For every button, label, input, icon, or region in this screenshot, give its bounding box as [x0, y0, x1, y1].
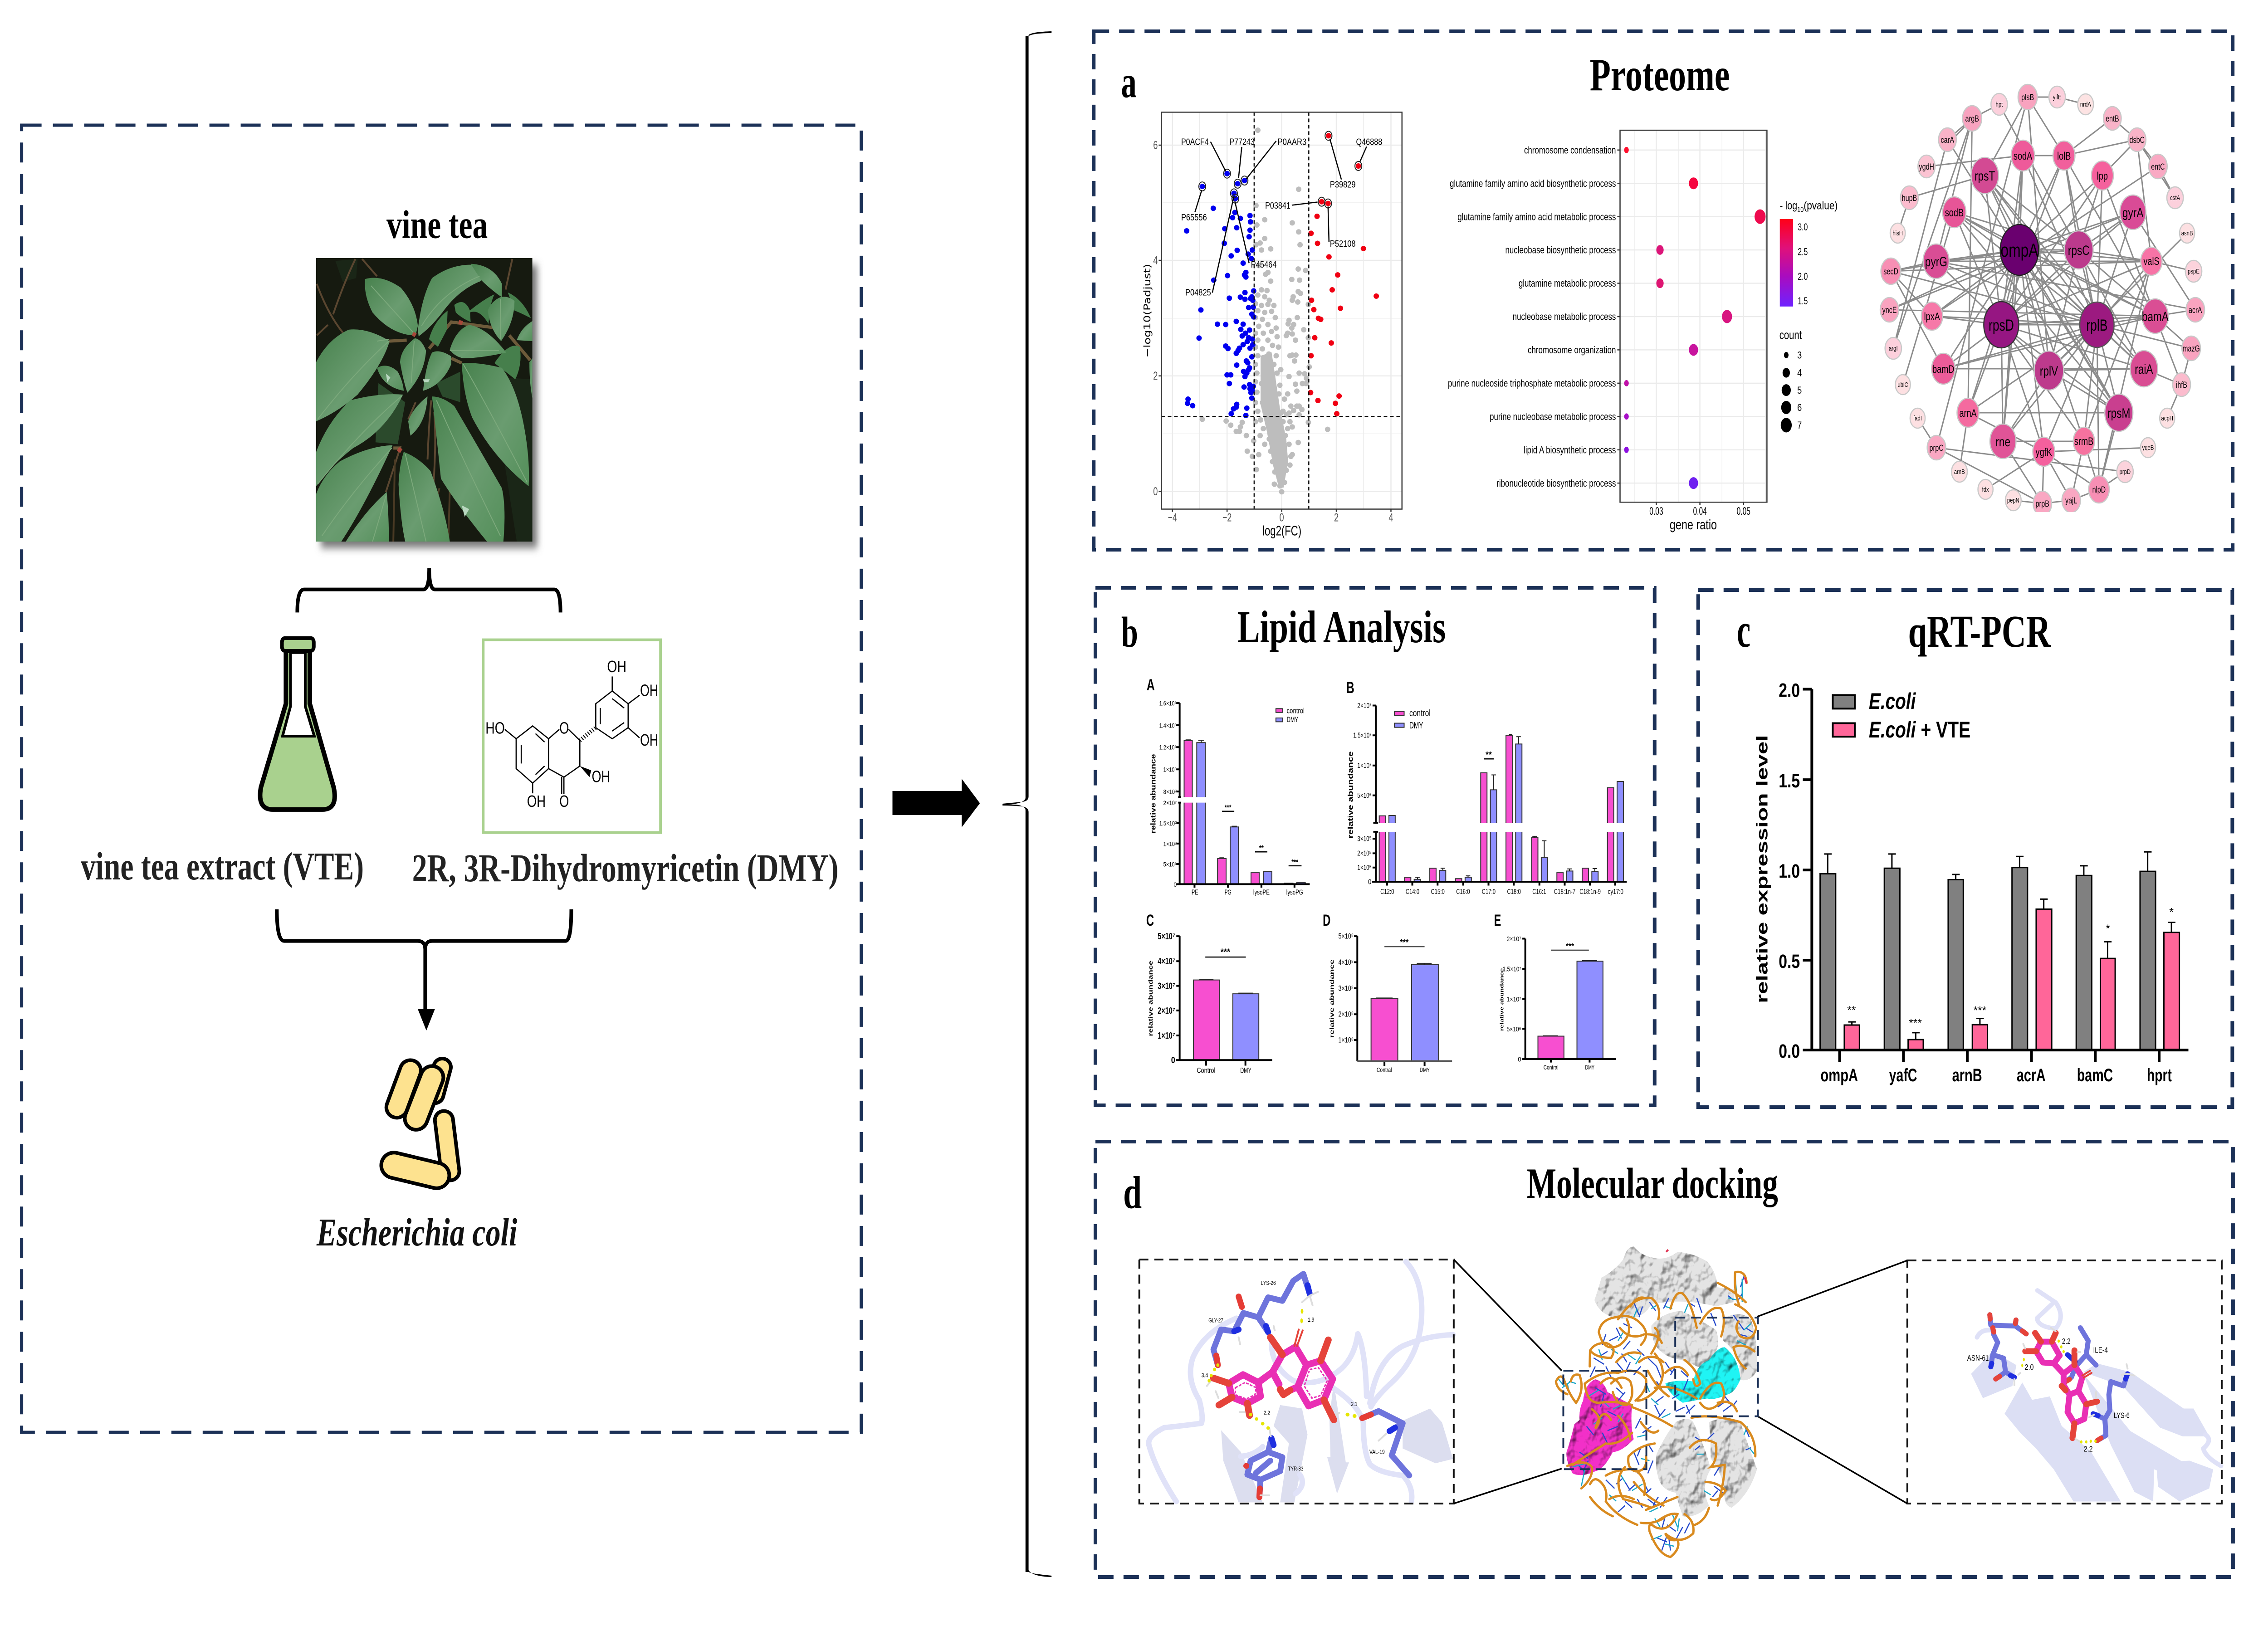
- molecule: dihydromyricetin structure: [483, 640, 660, 833]
- chart A: phospholipid classes: 1.2×10⁸: [1159, 744, 1177, 751]
- letter d and title: d: [1123, 1167, 1142, 1218]
- right docking inset: 2.0: [2024, 1363, 2033, 1372]
- chart D: control vs DMY: 4×10⁸: [1339, 957, 1354, 967]
- GO enrichment dot plot: 0.05: [1737, 505, 1750, 517]
- network node labels: argI: [1889, 344, 1898, 352]
- bar chart: relative expression level: 0.5: [1779, 951, 1800, 972]
- letter c and title: [1737, 604, 2051, 658]
- network node labels: rplB: [2086, 316, 2107, 334]
- network node labels: rpsM: [2107, 405, 2130, 421]
- chart B: fatty acids: C12:0: [1380, 888, 1394, 896]
- volcano plot: 0: [1153, 485, 1158, 498]
- GO enrichment dot plot: nucleobase biosynthetic process: [1505, 244, 1616, 256]
- network node labels: rpsC: [2068, 243, 2090, 258]
- network node labels: dsbC: [2130, 135, 2145, 145]
- panel: vine tea to Escherichia coli overview: [22, 125, 861, 1432]
- network node labels: prpB: [2035, 499, 2049, 509]
- chart E: control vs DMY: DMY: [1585, 1064, 1594, 1071]
- chart E: control vs DMY: 1×10⁷: [1507, 996, 1521, 1003]
- network node labels: lolB: [2057, 150, 2071, 162]
- chart D: control vs DMY: D: [1323, 911, 1330, 929]
- network node labels: ygfK: [2036, 446, 2052, 459]
- color and size legend: 3.0: [1798, 221, 1808, 233]
- network node labels: [1882, 93, 2202, 509]
- bar chart: relative expression level: ***: [1974, 1004, 1986, 1016]
- bar chart: relative expression level: 1.0: [1779, 860, 1800, 882]
- color and size legend: 10: [1797, 205, 1804, 214]
- chart C: control vs DMY: DMY: [1240, 1066, 1251, 1074]
- chart B: fatty acids: C16:0: [1456, 888, 1470, 896]
- GO enrichment dot plot: chromosome organization: [1528, 344, 1616, 356]
- chart A: phospholipid classes: 0: [1174, 881, 1177, 889]
- labels: extract and compound: 2R, 3R-Dihydromyricetin (DMY): [412, 846, 838, 890]
- volcano plot: Q46888: [1356, 137, 1382, 147]
- right docking inset: ILE-4: [2093, 1346, 2108, 1355]
- chart B: fatty acids: C18:1n-7: [1554, 888, 1575, 896]
- chart D: control vs DMY: 3×10⁸: [1339, 984, 1354, 992]
- chart A: phospholipid classes: lysoPE: [1253, 889, 1270, 896]
- volcano plot: P0ACF4: [1181, 137, 1209, 147]
- up-regulated points: [1310, 136, 1376, 414]
- volcano plot: −log10(Padjust): [1142, 264, 1153, 357]
- left docking inset: 2.1: [1351, 1401, 1357, 1407]
- panel d border: [1095, 1142, 2233, 1577]
- network node labels: prpC: [1930, 443, 1944, 453]
- GO enrichment dot plot: 0.03: [1649, 505, 1663, 517]
- chart B: fatty acids: C15:0: [1431, 888, 1445, 896]
- chart D: control vs DMY: relative abundance: [1329, 959, 1335, 1038]
- chart A: phospholipid classes: 1.5×10⁷: [1159, 820, 1177, 827]
- panel c border: [1698, 590, 2232, 1107]
- bar chart: relative expression level: **: [1847, 1004, 1856, 1016]
- chart E: control vs DMY: relative abundance: [1499, 968, 1505, 1031]
- chart B: fatty acids: C14:0: [1406, 888, 1419, 896]
- highlighted proteins: [1195, 131, 1367, 293]
- left docking inset: GLY-27: [1208, 1318, 1223, 1324]
- right docking inset: [1907, 1260, 2222, 1504]
- volcano plot: [1142, 112, 1402, 538]
- labels: extract and compound: [81, 844, 838, 890]
- surface: cyan protein: [1665, 1347, 1740, 1403]
- chart E: control vs DMY: Contral: [1544, 1064, 1559, 1071]
- vine tea title: vine tea: [386, 203, 488, 247]
- chart B: fatty acids: 2×10⁵: [1357, 849, 1371, 858]
- bar chart: relative expression level: ***: [1909, 1017, 1922, 1029]
- chart B: fatty acids: 1×10⁷: [1357, 762, 1371, 770]
- letter b and title: b: [1121, 609, 1138, 656]
- left docking inset: [1139, 1260, 1454, 1504]
- panel a: proteome: [1094, 31, 2233, 550]
- network node labels: srmB: [2074, 435, 2093, 448]
- network node labels: ygdH: [1919, 162, 1934, 172]
- network node labels: entC: [2151, 162, 2165, 172]
- network node labels: rpsD: [1989, 316, 2014, 334]
- network node labels: arnB: [1954, 468, 1965, 475]
- GO enrichment dot plot: lipid A biosynthetic process: [1524, 444, 1616, 455]
- left docking inset: VAL-19: [1369, 1449, 1385, 1455]
- letter a and title: a: [1121, 58, 1137, 107]
- chart A: phospholipid classes: ***: [1225, 804, 1232, 812]
- legend: [1833, 688, 1970, 742]
- network node labels: pyrG: [1925, 254, 1947, 269]
- chart A: phospholipid classes: [1147, 676, 1310, 896]
- chart D: control vs DMY: 2×10⁸: [1339, 1010, 1354, 1019]
- chart C: control vs DMY: 5×10⁷: [1158, 932, 1175, 942]
- chart A: phospholipid classes: PG: [1225, 889, 1232, 896]
- letter a and title: [1121, 49, 1730, 107]
- network node labels: rplV: [2040, 363, 2058, 379]
- photo: vine tea leaves: [316, 258, 533, 542]
- network node labels: carA: [1941, 135, 1955, 145]
- network node labels: yncE: [1882, 305, 1897, 315]
- volcano plot: P0AAR3: [1277, 137, 1306, 147]
- bar chart: relative expression level: bamC: [2077, 1065, 2113, 1085]
- chart B: fatty acids: [1346, 679, 1627, 896]
- non significant points: [1202, 130, 1328, 492]
- volcano plot: P03841: [1265, 200, 1290, 211]
- photo drop shadow: [321, 265, 537, 548]
- network node labels: bamA: [2142, 309, 2169, 324]
- network node labels: sodB: [1945, 207, 1964, 219]
- chart A: phospholipid classes: PE: [1192, 889, 1198, 896]
- left docking inset: LYS-26: [1261, 1280, 1276, 1286]
- volcano plot: −4: [1168, 511, 1177, 524]
- chart E: control vs DMY: 0: [1518, 1056, 1521, 1063]
- volcano plot: 4: [1388, 511, 1393, 524]
- GO enrichment dot plot: purine nucleobase metabolic process: [1490, 410, 1616, 422]
- chart B: fatty acids: cy17:0: [1608, 888, 1623, 896]
- overview panel border: [22, 125, 861, 1432]
- network node labels: plsB: [2021, 93, 2034, 103]
- chart D: control vs DMY: DMY: [1420, 1067, 1430, 1074]
- network node labels: hisH: [1892, 229, 1903, 237]
- ligand sticks: dihydromyricetin: [1229, 1347, 1333, 1406]
- GO enrichment dot plot: chromosome condensation: [1524, 144, 1616, 156]
- color and size legend: 2.0: [1798, 270, 1808, 282]
- legend: + VTE: [1921, 717, 1970, 742]
- color and size legend: 2.5: [1798, 246, 1808, 258]
- bar chart: relative expression level: 2.0: [1779, 679, 1800, 701]
- bar chart: relative expression level: relative expression level: [1754, 735, 1771, 1003]
- molecule: dihydromyricetin structure: OH: [592, 768, 610, 786]
- GO enrichment dot plot: glutamine family amino acid biosynthetic process: [1450, 177, 1616, 189]
- network node labels: fdx: [1982, 485, 1989, 493]
- volcano plot: P45464: [1251, 259, 1276, 270]
- network node labels: lpp: [2097, 170, 2108, 182]
- chart A: phospholipid classes: A: [1147, 676, 1155, 694]
- panel a border: [1094, 31, 2233, 550]
- chart B: fatty acids: C18:0: [1507, 888, 1521, 896]
- labels: extract and compound: vine tea extract (VTE): [81, 844, 364, 888]
- chart D: control vs DMY: 1×10⁸: [1339, 1035, 1354, 1044]
- molecule: dihydromyricetin structure: OH: [640, 682, 658, 700]
- letter d and title: [1123, 1160, 1778, 1218]
- letter b and title: [1121, 602, 1446, 656]
- chart B: fatty acids: relative abundance: [1347, 751, 1355, 838]
- chart B: fatty acids: DMY: [1409, 721, 1423, 731]
- color and size legend: 5: [1797, 384, 1802, 396]
- GO enrichment dot plot: nucleobase metabolic process: [1513, 311, 1616, 322]
- right docking inset: ASN-61: [1967, 1354, 1989, 1363]
- bar chart: relative expression level: hprt: [2147, 1065, 2172, 1085]
- right docking inset: 2.2: [2062, 1337, 2071, 1346]
- letter b and title: Lipid Analysis: [1237, 602, 1446, 652]
- Escherichia coli label: Escherichia coli: [316, 1210, 518, 1254]
- rRNA base ticks: [1578, 1276, 1753, 1551]
- connector lines between insets and ribosome: [1454, 1260, 1907, 1504]
- chart D: control vs DMY: [1323, 911, 1452, 1074]
- chart B: fatty acids: 3×10⁵: [1357, 835, 1371, 843]
- chart C: control vs DMY: relative abundance: [1147, 961, 1154, 1036]
- bar chart: relative expression level: *: [2169, 906, 2174, 918]
- network node labels: ubiC: [1897, 381, 1908, 388]
- network node labels: hpt: [1996, 100, 2003, 108]
- center dashed focus boxes: [1563, 1318, 1758, 1469]
- chart A: phospholipid classes: 1.4×10⁸: [1159, 723, 1177, 729]
- chart C: control vs DMY: 4×10⁷: [1158, 957, 1175, 967]
- surface: magenta protein: [1566, 1379, 1634, 1475]
- volcano plot: P39829: [1330, 179, 1356, 190]
- network nodes: [1880, 84, 2204, 516]
- volcano plot: 2: [1153, 370, 1158, 382]
- volcano plot: log2(FC): [1262, 523, 1301, 538]
- color and size legend: (pvalue): [1804, 199, 1838, 212]
- volcano plot: 0: [1280, 511, 1284, 524]
- network node labels: yajL: [2065, 496, 2077, 506]
- color and size legend: 3: [1797, 349, 1802, 361]
- chart A: phospholipid classes: 8×10⁷: [1163, 789, 1177, 796]
- color and size legend: 6: [1797, 402, 1802, 413]
- chart A: phospholipid classes: relative abundance: [1149, 754, 1158, 834]
- network node labels: acpH: [2161, 414, 2173, 422]
- network node labels: nrdA: [2080, 100, 2091, 108]
- left docking inset: 3.4: [1202, 1372, 1208, 1379]
- color and size legend: 7: [1797, 420, 1802, 431]
- network node labels: valS: [2143, 255, 2160, 268]
- network node labels: nlpD: [2092, 485, 2106, 495]
- volcano plot: P77243: [1229, 137, 1255, 147]
- chart E: control vs DMY: 5×10⁶: [1507, 1025, 1521, 1033]
- chart B: fatty acids: 5×10⁶: [1357, 791, 1371, 800]
- chart A: phospholipid classes: ***: [1291, 859, 1299, 866]
- molecule: dihydromyricetin structure: O: [559, 720, 569, 737]
- molecule: dihydromyricetin structure: O: [559, 793, 569, 811]
- icon: flask with vine tea extract: [260, 638, 335, 810]
- chart E: control vs DMY: E: [1494, 911, 1501, 929]
- volcano plot: 2: [1334, 511, 1339, 524]
- chart A: phospholipid classes: 1×10⁸: [1163, 767, 1177, 773]
- network node labels: fadI: [1913, 414, 1922, 422]
- chart A: phospholipid classes: lysoPG: [1286, 889, 1303, 896]
- color and size legend: 4: [1797, 367, 1802, 379]
- chart B: fatty acids: C17:0: [1482, 888, 1496, 896]
- GO enrichment dot plot: glutamine metabolic process: [1519, 278, 1616, 289]
- left docking inset: 2.2: [1264, 1410, 1270, 1416]
- right docking inset: 2.2: [2084, 1445, 2093, 1454]
- network node labels: entB: [2106, 114, 2119, 124]
- volcano plot: P52108: [1330, 239, 1356, 249]
- chart C: control vs DMY: 3×10⁷: [1158, 981, 1175, 991]
- rRNA backbone: [1556, 1272, 1756, 1557]
- chart B: fatty acids: 1.5×10⁷: [1353, 731, 1371, 739]
- network node labels: pepN: [2007, 496, 2019, 504]
- protein interaction network: [1880, 84, 2204, 526]
- panel c: qRT-PCR: [1698, 590, 2232, 1107]
- chart C: control vs DMY: Control: [1197, 1066, 1215, 1074]
- chart C: control vs DMY: ***: [1221, 947, 1230, 957]
- volcano plot: −2: [1222, 511, 1232, 524]
- lipid charts: [1146, 676, 1627, 1074]
- bar chart: relative expression level: yafC: [1889, 1065, 1917, 1085]
- network node labels: raiA: [2135, 361, 2153, 377]
- chart E: control vs DMY: 2×10⁷: [1507, 935, 1521, 943]
- letter a and title: Proteome: [1590, 49, 1730, 100]
- volcano plot: P04825: [1185, 287, 1211, 298]
- bar chart: relative expression level: [1754, 679, 2189, 1085]
- GO enrichment dot plot: [1448, 130, 1838, 532]
- network node labels: yifE: [2053, 93, 2062, 101]
- arrow: overview to analyses: [892, 779, 980, 827]
- ribosome structure: [1556, 1246, 1758, 1557]
- chart C: control vs DMY: [1146, 911, 1272, 1074]
- surface: gray protein subunits: [1594, 1246, 1757, 1517]
- network node labels: hupB: [1902, 193, 1917, 203]
- chart A: phospholipid classes: 1×10⁷: [1163, 841, 1177, 848]
- chart B: fatty acids: 2×10⁷: [1357, 701, 1371, 710]
- color and size legend: [1779, 199, 1838, 432]
- color and size legend: 1.5: [1798, 295, 1808, 307]
- chart A: phospholipid classes: control: [1287, 706, 1305, 715]
- legend: E.coli: [1869, 688, 1916, 714]
- chart B: fatty acids: control: [1409, 708, 1431, 718]
- large bracket: [1002, 31, 1051, 1577]
- chart D: control vs DMY: 5×10⁸: [1339, 932, 1354, 940]
- chart A: phospholipid classes: **: [1259, 845, 1264, 852]
- bar chart: relative expression level: arnB: [1952, 1065, 1982, 1085]
- chart C: control vs DMY: 0: [1171, 1055, 1175, 1065]
- chart B: fatty acids: **: [1486, 751, 1492, 760]
- bar chart: relative expression level: 1.5: [1779, 770, 1800, 792]
- volcano plot: P65556: [1181, 212, 1207, 223]
- volcano plot: 6: [1153, 139, 1158, 151]
- bar chart: relative expression level: 0.0: [1779, 1040, 1800, 1062]
- network node labels: mazG: [2183, 344, 2200, 354]
- down-regulated points: [1187, 174, 1254, 415]
- bar chart: relative expression level: ompA: [1820, 1065, 1858, 1085]
- GO enrichment dot plot: gene ratio: [1670, 517, 1717, 532]
- bar chart: relative expression level: acrA: [2017, 1065, 2046, 1085]
- network node labels: secD: [1883, 267, 1898, 277]
- left docking inset: TYR-83: [1288, 1466, 1303, 1472]
- chart C: control vs DMY: 1×10⁷: [1158, 1030, 1175, 1041]
- ligand sticks: receptor residues: [1213, 1274, 1409, 1497]
- network node labels: argB: [1965, 114, 1979, 124]
- molecule: dihydromyricetin structure: OH: [640, 732, 658, 749]
- chart C: control vs DMY: 2×10⁷: [1158, 1006, 1175, 1016]
- network node labels: rpsT: [1975, 168, 1995, 184]
- bar chart: relative expression level: *: [2106, 922, 2110, 935]
- chart D: control vs DMY: ***: [1400, 938, 1409, 947]
- network node labels: bamD: [1932, 363, 1954, 376]
- chart E: control vs DMY: 1.5×10⁷: [1503, 966, 1521, 973]
- network node labels: lpxA: [1924, 311, 1941, 323]
- color and size legend: count: [1779, 328, 1802, 342]
- GO enrichment dot plot: 0.04: [1693, 505, 1707, 517]
- network node labels: arnA: [1959, 407, 1977, 420]
- chart A: phospholipid classes: 5×10⁶: [1163, 861, 1177, 868]
- chart B: fatty acids: 1×10⁵: [1357, 864, 1371, 872]
- legend: E.coli: [1869, 717, 1916, 742]
- network node labels: sodA: [2014, 150, 2033, 162]
- molecule: dihydromyricetin structure: HO: [485, 720, 505, 737]
- network node labels: cstA: [2170, 194, 2180, 201]
- color and size legend: - log: [1780, 199, 1797, 212]
- right docking inset: LYS-6: [2114, 1411, 2130, 1420]
- chart B: fatty acids: C16:1: [1532, 888, 1546, 896]
- letter c and title: c: [1737, 604, 1750, 658]
- bottom brace with arrow: [277, 909, 571, 1030]
- chart E: control vs DMY: ***: [1566, 942, 1574, 951]
- network node labels: acrA: [2189, 305, 2202, 315]
- panel d: molecular docking: [1095, 1142, 2233, 1577]
- chart B: fatty acids: B: [1346, 679, 1354, 697]
- network node labels: yqeB: [2142, 444, 2154, 451]
- network node labels: ompA: [2001, 239, 2038, 261]
- GO enrichment dot plot: purine nucleoside triphosphate metabolic process: [1448, 377, 1616, 389]
- chart D: control vs DMY: Contral: [1377, 1067, 1392, 1074]
- network node labels: pspE: [2188, 267, 2200, 275]
- molecule: dihydromyricetin structure: OH: [607, 658, 626, 676]
- chart B: fatty acids: 0: [1368, 878, 1371, 886]
- chart A: phospholipid classes: 1.6×10⁸: [1159, 700, 1177, 707]
- network node labels: ihfB: [2176, 380, 2187, 390]
- GO enrichment dot plot: ribonucleotide biosynthetic process: [1496, 477, 1616, 489]
- panel b: lipid analysis: [1095, 588, 1655, 1105]
- molecule: dihydromyricetin structure: OH: [527, 793, 546, 811]
- left docking inset: 1.9: [1308, 1317, 1314, 1323]
- chart B: fatty acids: C18:1n-9: [1579, 888, 1601, 896]
- network node labels: asnB: [2181, 229, 2193, 237]
- network node labels: rne: [1995, 434, 2010, 449]
- network node labels: prpD: [2120, 468, 2131, 475]
- GO enrichment dot plot: glutamine family amino acid metabolic process: [1457, 211, 1616, 222]
- chart E: control vs DMY: [1494, 911, 1616, 1071]
- letter c and title: qRT-PCR: [1908, 607, 2051, 657]
- top brace: [297, 568, 561, 612]
- chart C: control vs DMY: C: [1146, 911, 1154, 929]
- network node labels: gyrA: [2122, 205, 2144, 220]
- volcano plot: 4: [1153, 254, 1158, 267]
- chart A: phospholipid classes: 2×10⁷: [1163, 800, 1177, 807]
- panel b border: [1095, 588, 1655, 1105]
- chart A: phospholipid classes: DMY: [1287, 715, 1298, 724]
- icon: E. coli bacteria: [394, 1067, 450, 1176]
